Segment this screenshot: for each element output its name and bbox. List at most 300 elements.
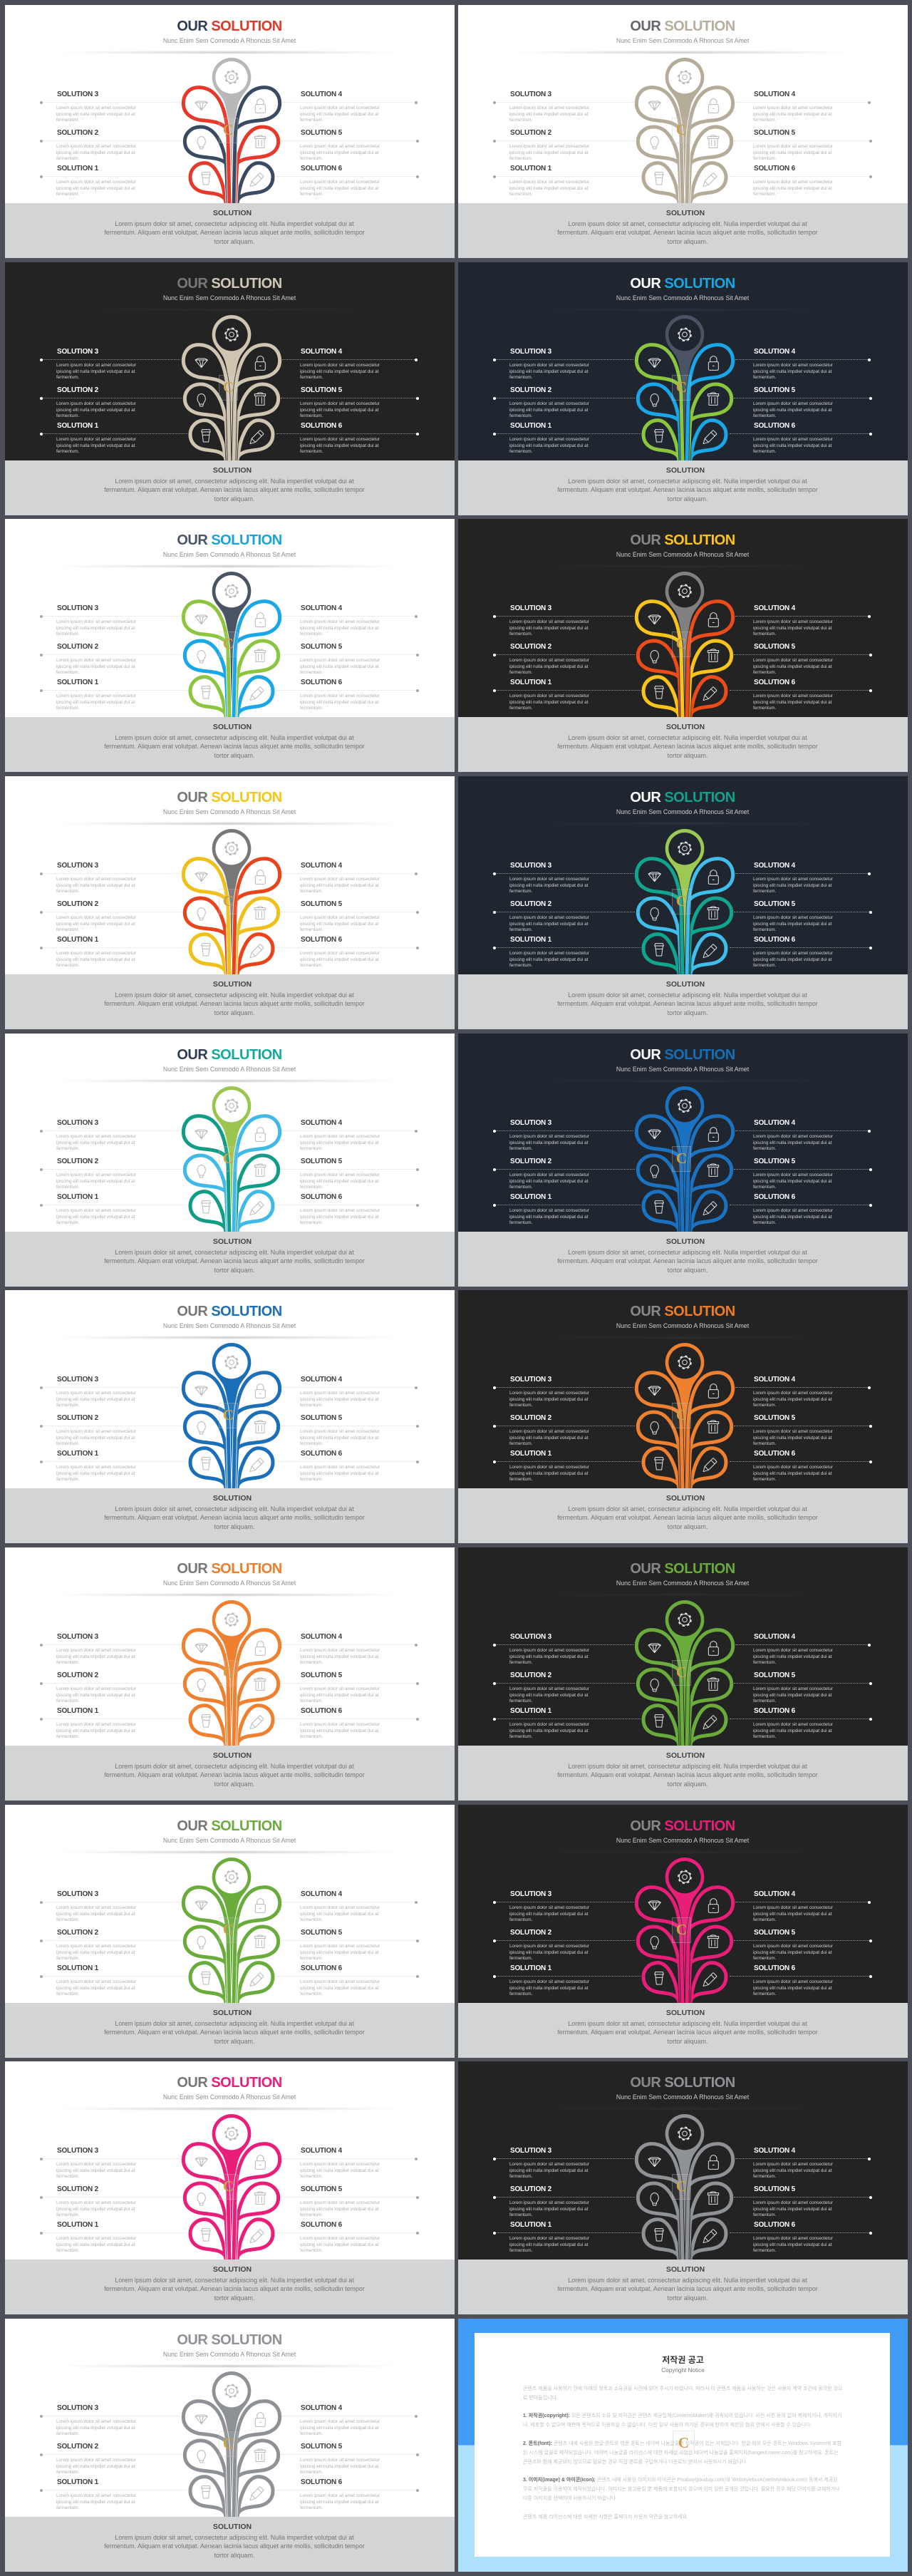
footer band: fermentum. Aliquam erat volutpat. Aenean lacinia lacus aliquet ante mollis, sollicitudin tempor (104, 2542, 365, 2550)
panel: dark pink (458, 1805, 908, 2057)
solution 5 (281, 1158, 419, 1200)
solution 3 (493, 862, 635, 905)
petal: bulb (638, 1669, 681, 1747)
solution 4: Lorem ipsum dolor sit amet consectetur (753, 1905, 833, 1910)
solution 2: SOLUTION 2 (510, 643, 551, 651)
petal: pencil (690, 163, 726, 205)
solution 2 (493, 2185, 636, 2228)
petal: lock (687, 1887, 733, 2004)
solution 6: Lorem ipsum dolor sit amet consectetur (753, 180, 833, 185)
footer band: fermentum. Aliquam erat volutpat. Aenean lacinia lacus aliquet ante mollis, sollicitudin tempor (104, 2029, 365, 2036)
footer band: tortor aliquam. (668, 1266, 708, 1273)
solution 3: Lorem ipsum dolor sit amet consectetur (56, 2162, 136, 2167)
solution 5: Lorem ipsum dolor sit amet consectetur (753, 401, 833, 406)
petal: bulb (185, 127, 228, 205)
solution 3: fermentum. (56, 1917, 79, 1922)
petal: pencil (237, 421, 273, 462)
petal: diamond (183, 2144, 229, 2261)
petal tree diagram (634, 572, 735, 717)
solution 6: Lorem ipsum dolor sit amet consectetur (753, 1979, 833, 1984)
petal: bulb (185, 898, 228, 976)
solution 2: ipiscing elit nulla impdiet volutpat dui at (56, 1436, 135, 1440)
solution 4: fermentum. (753, 632, 776, 637)
solution 1 (40, 2221, 188, 2264)
solution 3: ipiscing elit nulla impdiet volutpat dui at (509, 369, 588, 373)
solution 2: SOLUTION 2 (510, 1414, 551, 1422)
panel: white orange (5, 1547, 455, 1800)
solution 1 (40, 679, 188, 721)
footer band (458, 460, 908, 515)
solution 1: SOLUTION 1 (57, 1193, 98, 1201)
title: OUR SOLUTION (177, 532, 282, 548)
watermark (219, 889, 238, 915)
solution 6 (730, 679, 872, 721)
solution 1: SOLUTION 1 (510, 1193, 551, 1201)
solution 2: Lorem ipsum dolor sit amet consectetur (56, 1686, 136, 1691)
footer band: Lorem ipsum dolor sit amet, consectetur adipiscing elit. Nulla imperdiet volutpat dui at (568, 2020, 807, 2027)
solution 5: Lorem ipsum dolor sit amet consectetur (300, 401, 380, 406)
footer band: Lorem ipsum dolor sit amet, consectetur adipiscing elit. Nulla imperdiet volutpat dui at (568, 1762, 807, 1769)
footer band: Lorem ipsum dolor sit amet, consectetur adipiscing elit. Nulla imperdiet volutpat dui at (115, 2020, 354, 2027)
solution 3: Lorem ipsum dolor sit amet consectetur (56, 1905, 136, 1910)
solution 4: Lorem ipsum dolor sit amet consectetur (753, 1134, 833, 1139)
solution 5: ipiscing elit nulla impdiet volutpat dui at (300, 2207, 378, 2211)
solution 3: fermentum. (509, 2174, 532, 2179)
solution 1: fermentum. (509, 192, 532, 197)
watermark: C (676, 1406, 687, 1423)
solution 1 (493, 1193, 641, 1236)
watermark: C (678, 2434, 689, 2451)
top petal: gear (665, 572, 704, 718)
solution 4: SOLUTION 4 (754, 2147, 795, 2155)
solution 5: fermentum. (753, 1699, 776, 1704)
petal tree diagram (634, 315, 735, 460)
solution 3: fermentum. (509, 118, 532, 123)
solution 3 (493, 1119, 635, 1162)
solution 4: SOLUTION 4 (754, 348, 795, 356)
solution 4: ipiscing elit nulla impdiet volutpat dui at (300, 2425, 378, 2431)
solution 5: fermentum. (300, 670, 323, 675)
solution 4: ipiscing elit nulla impdiet volutpat dui at (300, 882, 378, 888)
solution 3: fermentum. (509, 889, 532, 894)
footer band (458, 1488, 908, 1542)
panel: white blue (5, 1290, 455, 1542)
petal: cup (643, 1192, 680, 1233)
solution 3: ipiscing elit nulla impdiet volutpat dui at (509, 1912, 588, 1916)
petal: pencil (237, 163, 273, 205)
solution 4 (735, 91, 871, 133)
panel: copyright notice (458, 2319, 908, 2572)
solution 6: SOLUTION 6 (301, 165, 342, 172)
solution 4: Lorem ipsum dolor sit amet consectetur (753, 877, 833, 882)
solution 5: Lorem ipsum dolor sit amet consectetur (300, 1429, 380, 1434)
solution 1: ipiscing elit nulla impdiet volutpat dui at (509, 1471, 588, 1475)
solution 4: Lorem ipsum dolor sit amet consectetur (753, 105, 833, 110)
watermark (673, 2431, 695, 2454)
solution 5: fermentum. (753, 1185, 776, 1190)
petal: bulb (185, 1412, 228, 1490)
solution 1 (40, 936, 188, 979)
solution 1: fermentum. (56, 963, 79, 968)
petal: cup (190, 1192, 227, 1233)
solution 2: Lorem ipsum dolor sit amet consectetur (509, 1173, 589, 1178)
solution 2: fermentum. (56, 156, 79, 161)
solution 2: SOLUTION 2 (57, 1158, 98, 1165)
solution 3: Lorem ipsum dolor sit amet consectetur (509, 2162, 589, 2167)
petal tree diagram (181, 572, 282, 717)
watermark (672, 889, 691, 915)
solution 5: ipiscing elit nulla impdiet volutpat dui at (753, 150, 831, 155)
footer band: fermentum. Aliquam erat volutpat. Aenean lacinia lacus aliquet ante mollis, sollicitudin tempor (557, 1771, 818, 1778)
solution 6: fermentum. (753, 1220, 776, 1225)
solution 3 (40, 604, 182, 647)
solution 1: fermentum. (56, 192, 79, 197)
solution 5: fermentum. (300, 1956, 323, 1961)
footer band (5, 1746, 455, 1800)
footer band: Lorem ipsum dolor sit amet, consectetur adipiscing elit. Nulla imperdiet volutpat dui at (568, 2277, 807, 2284)
solution 4: Lorem ipsum dolor sit amet consectetur (300, 1391, 380, 1396)
solution 5: ipiscing elit nulla impdiet volutpat dui at (300, 921, 378, 927)
solution 3: fermentum. (56, 375, 79, 380)
solution 2 (493, 129, 636, 172)
solution 2: fermentum. (509, 413, 532, 418)
solution 2: ipiscing elit nulla impdiet volutpat dui at (56, 2207, 135, 2211)
solution 2: SOLUTION 2 (57, 2185, 98, 2193)
solution 3: fermentum. (56, 1660, 79, 1665)
solution 2: ipiscing elit nulla impdiet volutpat dui at (509, 1179, 588, 1183)
panel: white red and navy (5, 5, 455, 258)
solution 2: SOLUTION 2 (57, 643, 98, 651)
petal: bulb (638, 2183, 681, 2261)
footer band: Lorem ipsum dolor sit amet, consectetur adipiscing elit. Nulla imperdiet volutpat dui at (115, 478, 354, 485)
petal: bin (688, 384, 732, 462)
petal: bin (235, 2441, 279, 2518)
footer band: fermentum. Aliquam erat volutpat. Aenean lacinia lacus aliquet ante mollis, sollicitudin tempor (104, 743, 365, 750)
solution 2: Lorem ipsum dolor sit amet consectetur (56, 1944, 136, 1949)
watermark (672, 1660, 691, 1686)
solution 5: SOLUTION 5 (301, 1671, 342, 1679)
solution 5: fermentum. (300, 413, 323, 418)
footer band: fermentum. Aliquam erat volutpat. Aenean lacinia lacus aliquet ante mollis, sollicitudin tempor (104, 1000, 365, 1007)
solution 2 (40, 1671, 183, 1714)
solution 2 (493, 643, 636, 686)
solution 1: fermentum. (509, 706, 532, 711)
solution 6: SOLUTION 6 (754, 1964, 795, 1972)
petal: bin (688, 898, 732, 976)
watermark (219, 1660, 238, 1686)
solution 6: SOLUTION 6 (754, 1707, 795, 1715)
solution 2: fermentum. (509, 1441, 532, 1446)
notice subtitle: Copyright Notice (661, 2367, 705, 2374)
solution 6: fermentum. (753, 1477, 776, 1482)
footer band: tortor aliquam. (668, 751, 708, 758)
solution 1 (40, 1193, 188, 1236)
petal: lock (687, 2144, 733, 2261)
solution 3 (493, 1633, 635, 1676)
footer band: SOLUTION (213, 723, 252, 731)
solution 1: fermentum. (56, 1220, 79, 1225)
panel: dark grey (458, 2061, 908, 2314)
solution 2: Lorem ipsum dolor sit amet consectetur (509, 915, 589, 920)
solution 3: fermentum. (509, 632, 532, 637)
solution 4: ipiscing elit nulla impdiet volutpat dui at (753, 369, 831, 373)
solution 5 (734, 1671, 872, 1714)
solution 3: SOLUTION 3 (57, 2147, 98, 2155)
petal: bin (235, 898, 279, 976)
petal: bin (235, 127, 279, 205)
top petal: gear (665, 829, 704, 976)
solution 2: Lorem ipsum dolor sit amet consectetur (56, 2458, 136, 2463)
solution 6: SOLUTION 6 (754, 1450, 795, 1458)
solution 6 (276, 2221, 419, 2264)
solution 4: ipiscing elit nulla impdiet volutpat dui at (300, 1912, 378, 1916)
solution 5: Lorem ipsum dolor sit amet consectetur (300, 1173, 380, 1178)
solution 3 (493, 604, 635, 647)
solution 6: fermentum. (300, 2505, 323, 2510)
solution 5: SOLUTION 5 (301, 900, 342, 908)
solution 1: Lorem ipsum dolor sit amet consectetur (509, 437, 589, 442)
petal tree diagram (181, 1086, 282, 1232)
subtitle: Nunc Enim Sem Commodo A Rhoncus Sit Amet (616, 1580, 749, 1587)
solution 5: ipiscing elit nulla impdiet volutpat dui at (753, 1692, 831, 1698)
solution 5: Lorem ipsum dolor sit amet consectetur (300, 1944, 380, 1949)
title: OUR SOLUTION (630, 19, 735, 34)
solution 1: ipiscing elit nulla impdiet volutpat dui at (56, 1728, 135, 1733)
watermark (219, 118, 238, 143)
solution 3: SOLUTION 3 (510, 1376, 551, 1384)
solution 3: Lorem ipsum dolor sit amet consectetur (56, 363, 136, 368)
solution 1: ipiscing elit nulla impdiet volutpat dui at (56, 1215, 135, 1219)
solution 6: fermentum. (753, 1992, 776, 1997)
solution 1: fermentum. (56, 449, 79, 454)
solution 6: SOLUTION 6 (301, 1964, 342, 1972)
solution 4: ipiscing elit nulla impdiet volutpat dui at (753, 1140, 831, 1145)
solution 1 (40, 2478, 188, 2521)
solution 2: SOLUTION 2 (57, 1414, 98, 1422)
solution 3: Lorem ipsum dolor sit amet consectetur (509, 1391, 589, 1396)
solution 3: ipiscing elit nulla impdiet volutpat dui at (509, 2168, 588, 2173)
subtitle: Nunc Enim Sem Commodo A Rhoncus Sit Amet (163, 1066, 296, 1073)
footer band: Lorem ipsum dolor sit amet, consectetur adipiscing elit. Nulla imperdiet volutpat dui at (568, 1249, 807, 1256)
top petal: gear (665, 1086, 704, 1233)
solution 4 (282, 1633, 418, 1676)
solution 6 (730, 422, 872, 465)
petal: pencil (237, 1706, 273, 1747)
petal: bin (235, 1927, 279, 2004)
footer band: Lorem ipsum dolor sit amet, consectetur adipiscing elit. Nulla imperdiet volutpat dui at (115, 220, 354, 227)
petal: bin (688, 1155, 732, 1233)
solution 2 (40, 386, 183, 429)
solution 6: SOLUTION 6 (754, 1193, 795, 1201)
solution 1: fermentum. (56, 1992, 79, 1997)
footer band: Lorem ipsum dolor sit amet, consectetur adipiscing elit. Nulla imperdiet volutpat dui at (115, 991, 354, 998)
solution 2: fermentum. (56, 1699, 79, 1704)
solution 4 (282, 1119, 418, 1162)
solution 3: Lorem ipsum dolor sit amet consectetur (56, 1391, 136, 1396)
solution 6 (276, 1964, 419, 2007)
solution 1: ipiscing elit nulla impdiet volutpat dui at (56, 2242, 135, 2247)
solution 6: SOLUTION 6 (301, 936, 342, 944)
petal: lock (687, 602, 733, 718)
solution 2: fermentum. (56, 413, 79, 418)
solution 4 (735, 1376, 871, 1418)
petal: lock (234, 1630, 280, 1747)
footer band: SOLUTION (666, 209, 705, 217)
petal: bin (235, 1155, 279, 1233)
footer band: fermentum. Aliquam erat volutpat. Aenean lacinia lacus aliquet ante mollis, sollicitudin tempor (557, 486, 818, 493)
solution 3: ipiscing elit nulla impdiet volutpat dui at (56, 369, 135, 373)
solution 3: ipiscing elit nulla impdiet volutpat dui at (56, 111, 135, 117)
subtitle: Nunc Enim Sem Commodo A Rhoncus Sit Amet (616, 551, 749, 558)
solution 4: fermentum. (753, 889, 776, 894)
footer band (458, 1746, 908, 1800)
solution 1: Lorem ipsum dolor sit amet consectetur (509, 951, 589, 956)
solution 2 (40, 1158, 183, 1200)
solution 1: ipiscing elit nulla impdiet volutpat dui at (56, 443, 135, 448)
footer band: tortor aliquam. (214, 2037, 254, 2044)
solution 2: SOLUTION 2 (57, 2443, 98, 2451)
subtitle: Nunc Enim Sem Commodo A Rhoncus Sit Amet (163, 808, 296, 815)
solution 3: fermentum. (56, 1403, 79, 1408)
solution 5: ipiscing elit nulla impdiet volutpat dui at (300, 150, 378, 155)
solution 3: ipiscing elit nulla impdiet volutpat dui at (56, 1912, 135, 1916)
solution 6: Lorem ipsum dolor sit amet consectetur (753, 1208, 833, 1213)
petal: pencil (237, 1963, 273, 2004)
solution 6: Lorem ipsum dolor sit amet consectetur (300, 1722, 380, 1727)
solution 5: SOLUTION 5 (754, 1929, 795, 1937)
solution 6: Lorem ipsum dolor sit amet consectetur (300, 1979, 380, 1984)
petal tree diagram (181, 1600, 282, 1746)
title: OUR SOLUTION (630, 790, 735, 805)
watermark: C (676, 1921, 687, 1938)
title: OUR SOLUTION (630, 1818, 735, 1834)
watermark: C (223, 2435, 234, 2452)
solution 1: SOLUTION 1 (57, 2478, 98, 2486)
solution 5: Lorem ipsum dolor sit amet consectetur (300, 1686, 380, 1691)
solution 3: fermentum. (56, 889, 79, 894)
solution 4 (282, 1890, 418, 1933)
solution 3: ipiscing elit nulla impdiet volutpat dui at (509, 1654, 588, 1659)
solution 5: Lorem ipsum dolor sit amet consectetur (753, 144, 833, 149)
footer band: fermentum. Aliquam erat volutpat. Aenean lacinia lacus aliquet ante mollis, sollicitudin tempor (557, 1257, 818, 1264)
solution 4: Lorem ipsum dolor sit amet consectetur (300, 877, 380, 882)
solution 1: Lorem ipsum dolor sit amet consectetur (509, 694, 589, 699)
solution 1: Lorem ipsum dolor sit amet consectetur (56, 437, 136, 442)
solution 3: Lorem ipsum dolor sit amet consectetur (56, 1134, 136, 1139)
solution 1 (40, 422, 188, 465)
top petal: gear (665, 1600, 704, 1747)
solution 3: SOLUTION 3 (57, 1890, 98, 1898)
title: OUR SOLUTION (630, 1304, 735, 1319)
solution 4: ipiscing elit nulla impdiet volutpat dui at (753, 882, 831, 888)
solution 6 (730, 936, 872, 979)
solution 1: SOLUTION 1 (510, 165, 551, 172)
top petal: gear (212, 1343, 251, 1490)
petal: lock (234, 1116, 280, 1233)
solution 6: fermentum. (753, 449, 776, 454)
solution 4: SOLUTION 4 (301, 1376, 342, 1384)
petal: bulb (185, 1669, 228, 1747)
footer band: fermentum. Aliquam erat volutpat. Aenean lacinia lacus aliquet ante mollis, sollicitudin tempor (557, 1514, 818, 1521)
solution 6: SOLUTION 6 (301, 679, 342, 686)
solution 1 (493, 936, 641, 979)
solution 4: SOLUTION 4 (754, 1119, 795, 1127)
solution 4: fermentum. (300, 1660, 323, 1665)
watermark: C (223, 2178, 234, 2195)
footer band: SOLUTION (213, 2009, 252, 2017)
footer band (458, 2003, 908, 2057)
footer band: Lorem ipsum dolor sit amet, consectetur adipiscing elit. Nulla imperdiet volutpat dui at (568, 1505, 807, 1513)
solution 4 (282, 2404, 418, 2447)
petal: bulb (185, 1927, 228, 2004)
footer band (5, 1488, 455, 1542)
petal: pencil (690, 1706, 726, 1747)
solution 1: ipiscing elit nulla impdiet volutpat dui at (56, 1471, 135, 1475)
solution 6: Lorem ipsum dolor sit amet consectetur (300, 2236, 380, 2241)
solution 6 (276, 2478, 419, 2521)
solution 6: Lorem ipsum dolor sit amet consectetur (753, 1465, 833, 1470)
solution 5: ipiscing elit nulla impdiet volutpat dui at (300, 1436, 378, 1440)
petal: bin (688, 1669, 732, 1747)
watermark (219, 2431, 238, 2457)
petal: pencil (237, 1448, 273, 1490)
solution 1 (493, 1964, 641, 2007)
subtitle: Nunc Enim Sem Commodo A Rhoncus Sit Amet (163, 37, 296, 44)
solution 6: ipiscing elit nulla impdiet volutpat dui at (753, 1215, 831, 1219)
footer band: Lorem ipsum dolor sit amet, consectetur adipiscing elit. Nulla imperdiet volutpat dui at (568, 478, 807, 485)
solution 2: ipiscing elit nulla impdiet volutpat dui at (56, 664, 135, 669)
solution 1: Lorem ipsum dolor sit amet consectetur (56, 2236, 136, 2241)
petal: diamond (636, 1116, 683, 1233)
solution 1: Lorem ipsum dolor sit amet consectetur (56, 951, 136, 956)
petal: lock (687, 1630, 733, 1747)
solution 2 (493, 1414, 636, 1457)
solution 4 (735, 604, 871, 647)
footer band: SOLUTION (666, 1751, 705, 1760)
petal: diamond (183, 1116, 229, 1233)
solution 2 (493, 900, 636, 943)
solution 5: ipiscing elit nulla impdiet volutpat dui at (300, 1692, 378, 1698)
solution 5 (734, 129, 872, 172)
petal: diamond (636, 345, 683, 462)
top petal: gear (212, 1086, 251, 1233)
solution 6 (276, 165, 419, 207)
solution 3: SOLUTION 3 (510, 604, 551, 612)
solution 3: SOLUTION 3 (510, 91, 551, 98)
solution 6: ipiscing elit nulla impdiet volutpat dui at (300, 1728, 378, 1733)
watermark (219, 1403, 238, 1428)
solution 2: Lorem ipsum dolor sit amet consectetur (509, 658, 589, 663)
footer band: tortor aliquam. (214, 238, 254, 245)
panel: white teal and sky (5, 1034, 455, 1286)
petal: pencil (690, 421, 726, 462)
solution 4: ipiscing elit nulla impdiet volutpat dui at (753, 2168, 831, 2173)
solution 3: fermentum. (509, 1660, 532, 1665)
petal tree diagram (634, 2114, 735, 2260)
notice body text (523, 2386, 843, 2519)
footer band: SOLUTION (213, 1237, 252, 1246)
solution 3 (40, 1890, 182, 1933)
footer band: tortor aliquam. (214, 2294, 254, 2301)
solution 3: Lorem ipsum dolor sit amet consectetur (509, 105, 589, 110)
notice body text: 1. 저작권(copyright): 모든 콘텐츠의 소유 및 저작권은 콘텐츠 제공업체(ContentsMaker)에 귀속되어 있습니다. 사전 서면 동의 없이 복제하거나, 개작하거나, 배포할 수 없으며 재판매 목적으로 이용하실 수 없습니다. 다만 일부 사용이 허가된 경우에 한하여 제한된 범위 안에서 사용할 수 있습니다. (523, 2413, 841, 2428)
solution 4: SOLUTION 4 (754, 91, 795, 98)
solution 4: SOLUTION 4 (301, 604, 342, 612)
solution 1: Lorem ipsum dolor sit amet consectetur (56, 1208, 136, 1213)
footer band: fermentum. Aliquam erat volutpat. Aenean lacinia lacus aliquet ante mollis, sollicitudin tempor (557, 743, 818, 750)
footer band: fermentum. Aliquam erat volutpat. Aenean lacinia lacus aliquet ante mollis, sollicitudin tempor (557, 1000, 818, 1007)
title: OUR SOLUTION (177, 1304, 282, 1319)
